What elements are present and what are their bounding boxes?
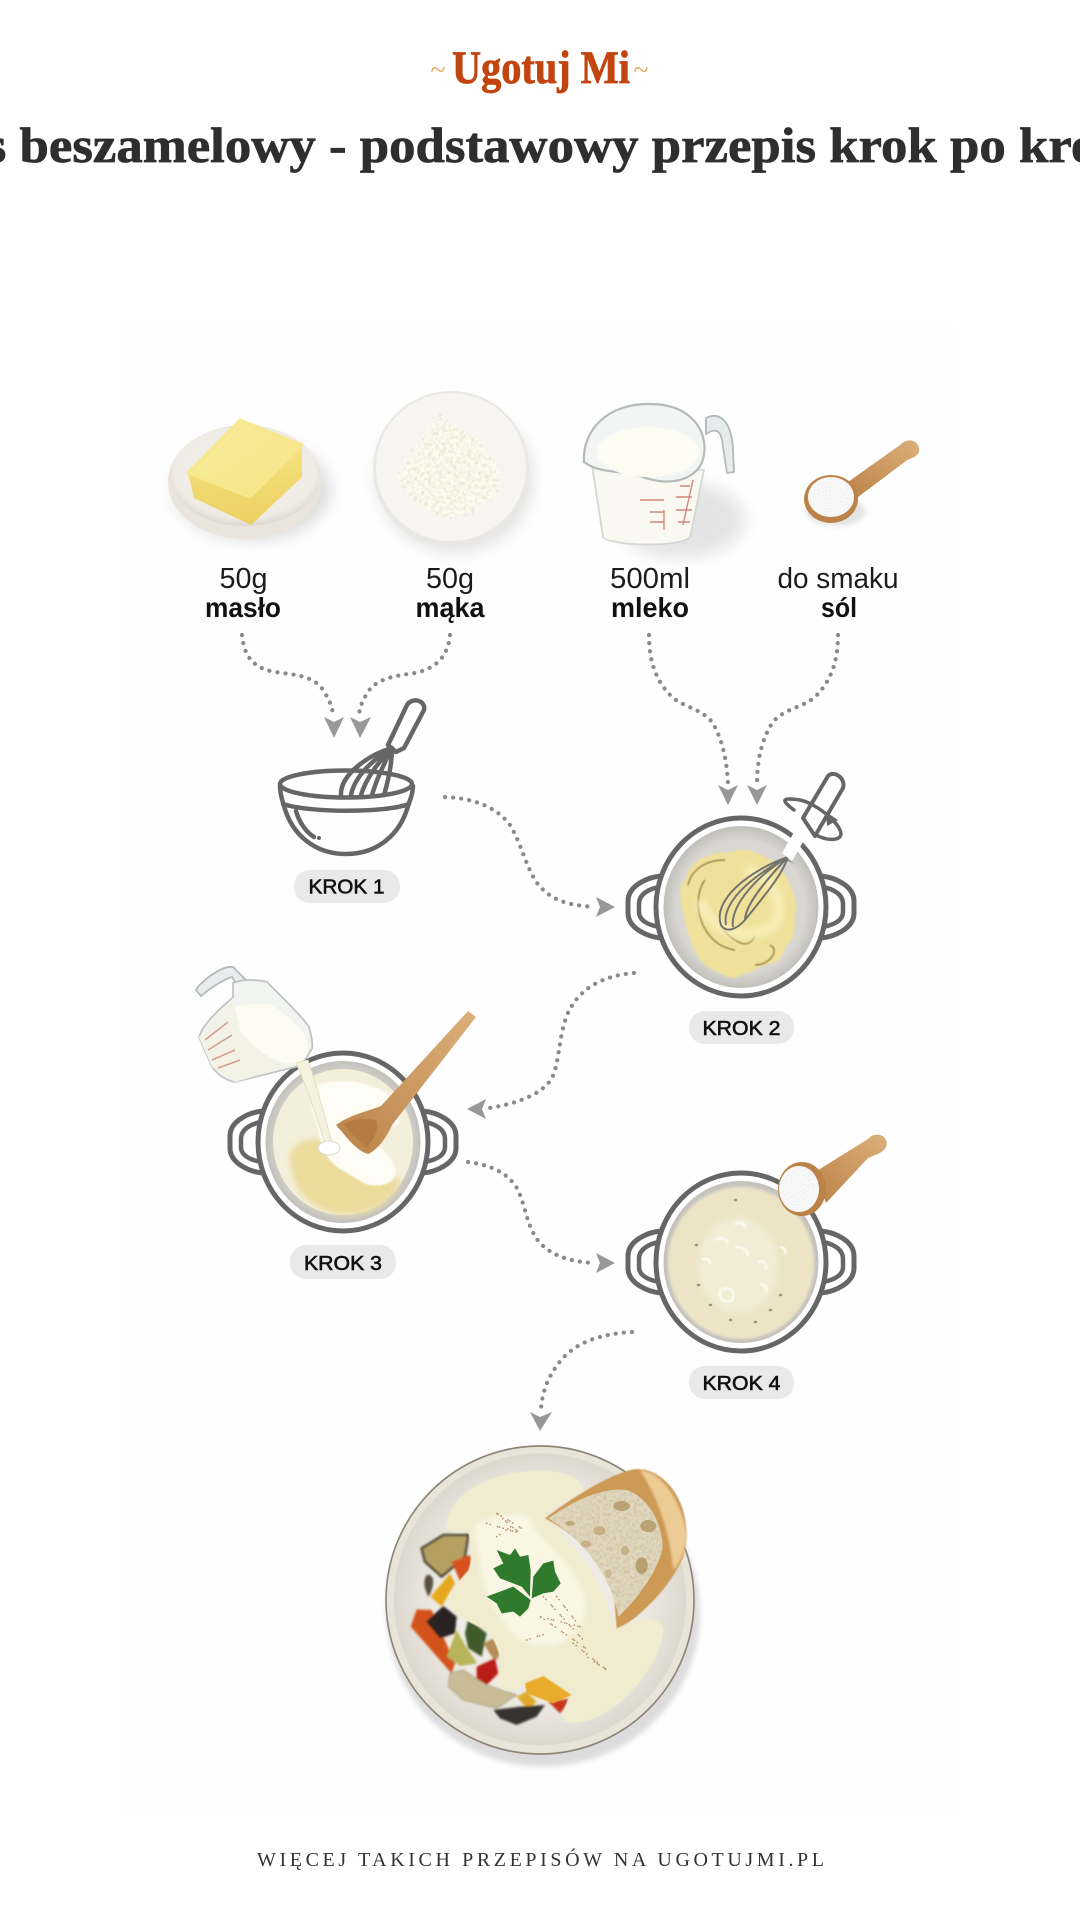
backdrop panel <box>120 325 955 1815</box>
sauce <box>447 1471 663 1723</box>
ingredient: milk jug <box>584 404 745 558</box>
step 3 label: KROK 3 <box>304 1252 382 1275</box>
step 2: pot with roux and whisk <box>628 774 854 996</box>
roasted vegetables <box>411 1535 572 1725</box>
ingredient labels: sól <box>821 592 857 623</box>
ingredient: salt spoon <box>804 440 919 526</box>
ingredient labels <box>205 563 898 623</box>
arrow: mleko to krok 2 <box>649 635 738 805</box>
ingredient labels: 50g <box>220 563 268 595</box>
step 4 label: KROK 4 <box>702 1372 780 1395</box>
arrow: krok 4 to final dish <box>530 1332 632 1431</box>
step 1: bowl and whisk icon <box>280 700 424 854</box>
footer: WIĘCEJ TAKICH PRZEPISÓW NA UGOTUJMI.PL <box>257 1847 824 1871</box>
step 4 label <box>689 1366 794 1399</box>
step 3: pot with milk being poured <box>196 967 476 1231</box>
step 2 label <box>689 1011 794 1044</box>
ingredient labels: mleko <box>611 592 689 623</box>
arrow: mąka to krok 1 <box>350 635 450 738</box>
ingredient labels: 50g <box>426 563 474 595</box>
brand logo: ~ <box>430 55 446 86</box>
step 1 label <box>294 870 400 903</box>
brand logo: ~ <box>633 55 649 86</box>
arrow: sól to krok 2 <box>747 635 838 805</box>
arrow: krok 1 to krok 2 <box>445 797 615 917</box>
ingredient: butter <box>168 420 330 540</box>
arrow: masło to krok 1 <box>242 635 344 738</box>
ingredient labels: mąka <box>416 592 485 623</box>
ingredient labels: masło <box>205 592 281 623</box>
ingredient labels: 500ml <box>610 563 690 595</box>
brand logo: Ugotuj Mi <box>452 42 630 94</box>
ingredient labels: do smaku <box>778 563 898 595</box>
parsley <box>487 1548 561 1617</box>
arrow: krok 3 to krok 4 <box>468 1162 615 1273</box>
final dish: bowl with sauce, bread and vegetables <box>386 1446 700 1767</box>
ingredient: flour <box>373 391 533 552</box>
step 2 label: KROK 2 <box>702 1017 780 1040</box>
arrow: krok 2 to krok 3 <box>467 973 634 1119</box>
step 1 label: KROK 1 <box>308 876 384 898</box>
step 3 label <box>290 1245 396 1279</box>
step 4: pot with seasoned sauce <box>628 1135 887 1351</box>
bread <box>545 1469 686 1628</box>
